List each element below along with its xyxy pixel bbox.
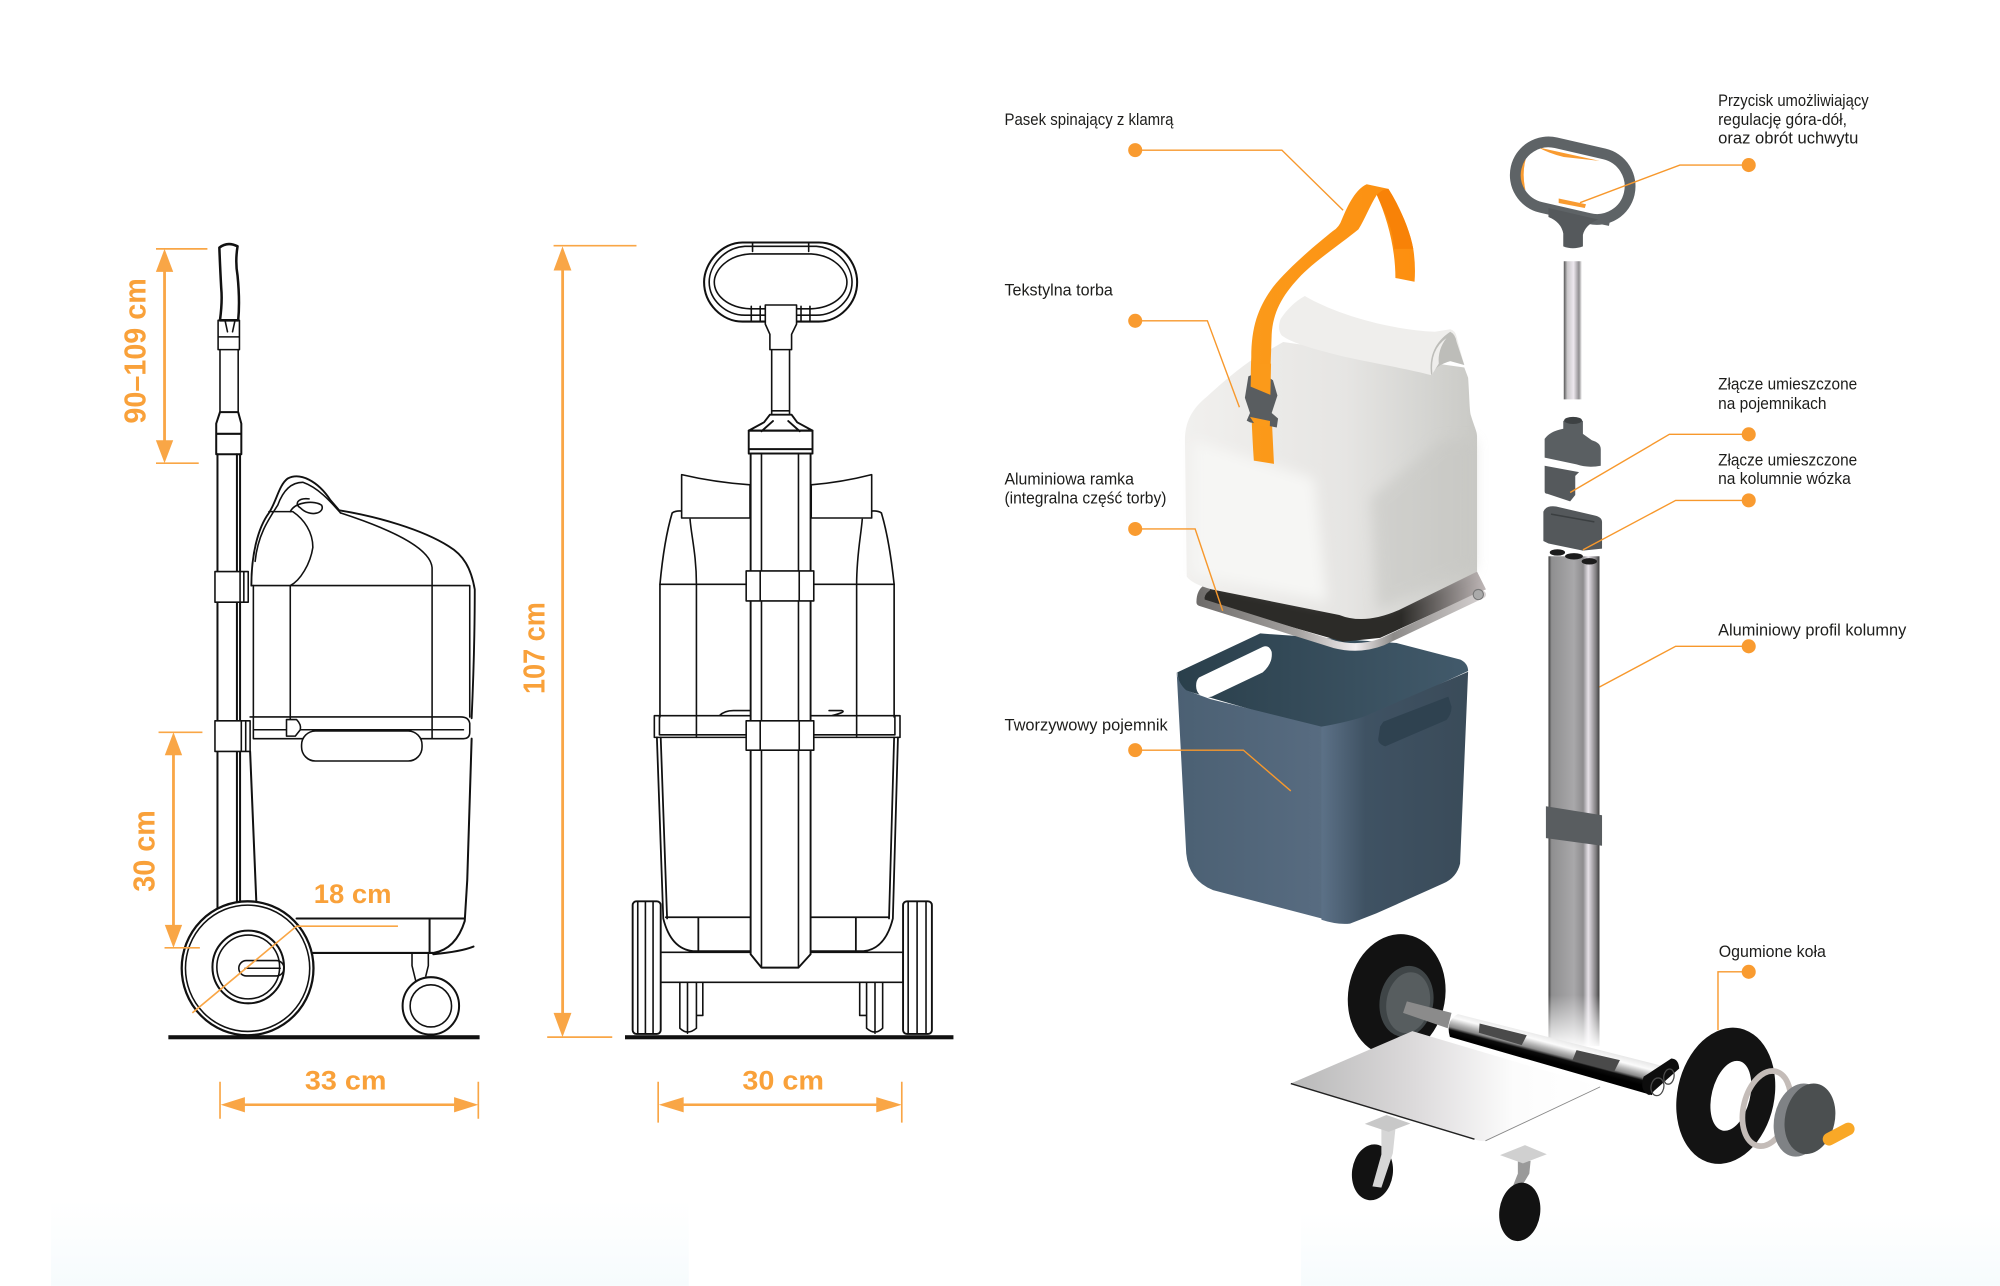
bucket handle slot [302,731,422,761]
clamp upper [746,571,814,601]
callout: bag: Tekstylna torba [1004,281,1114,300]
dimension: 107 cm [518,246,636,1037]
handle [1509,135,1637,248]
callout: container [1004,715,1291,791]
bucket [657,737,898,951]
left caster [1348,1115,1410,1203]
handle collar [218,320,239,350]
hub [212,931,284,1003]
callout: handle button: regulację góra-dół, [1718,110,1847,129]
connector top [1545,417,1601,467]
column holes [1550,549,1597,565]
callout: column profile [1599,620,1907,687]
lower clamp [215,721,250,751]
handle front [704,242,857,322]
left caster [680,982,703,1033]
strap above buckle [1251,364,1271,395]
orange strap [1245,184,1415,464]
column [751,454,811,968]
telescopic collar [216,412,241,454]
frame [654,711,900,737]
tyre [1664,1018,1787,1173]
axle bar [661,952,903,982]
callout: column connector [1583,451,1857,550]
dimension: 33 cm width [220,1065,478,1119]
container right face [1321,672,1468,924]
exploded wheel [1664,1018,1848,1173]
bag seams [660,519,894,737]
dimension: 90-109 cm: 90–109 cm [118,278,152,424]
bucket outline [250,739,474,954]
bag inner arc [269,512,313,586]
strap below buckle [1250,417,1270,427]
aluminium frame [1200,572,1486,647]
plastic container [1177,633,1468,924]
connector plate [1545,466,1579,501]
axle slot [239,961,284,976]
handle stem [765,305,797,350]
callout: column connector: na kolumnie wózka [1718,469,1851,488]
strap inner shadow [1377,189,1413,249]
bag sides [660,511,894,717]
bag side shading [1371,440,1474,610]
handle lower bar [1541,208,1610,222]
left wheel [633,901,661,1034]
right caster [1495,1145,1547,1244]
bag body [1185,342,1477,619]
callout: strap: Pasek spinający z klamrą [1004,110,1174,129]
bag lines [251,513,470,739]
frame hinge [287,720,301,736]
connector column [1543,506,1602,551]
callout: container: Tworzywowy pojemnik [1004,715,1168,734]
callout: frame: Aluminiowa ramka [1004,470,1135,489]
callout: handle button: oraz obrót uchwytu [1718,128,1858,147]
dimension: 30 cm width [658,1065,902,1123]
handle button [1559,198,1586,208]
axle slot left [1479,1023,1527,1045]
callout: container connector: Złącze umieszczone [1718,375,1857,394]
dimension: 107 cm: 107 cm [518,602,552,694]
collar [749,431,812,454]
column clamp [1546,806,1602,846]
roll left [682,475,750,518]
callout: container connector: na pojemnikach [1718,394,1827,413]
callout: rubber wheels: Ogumione koła [1719,942,1827,961]
dimension: 30 cm height [127,732,202,948]
handle orange insert [1514,147,1599,190]
callout: frame: (integralna część torby) [1004,489,1166,508]
callout: handle button [1580,91,1869,203]
bag roll fold [1431,332,1464,375]
upper clamp [215,572,248,602]
axle slot right [1572,1050,1620,1072]
short axle [1403,1001,1452,1028]
lower pole [217,454,240,908]
container left face [1177,672,1327,920]
frame pin [1473,589,1483,600]
callout: container connector [1570,375,1857,492]
handle grip side [219,244,239,320]
frame rim [1200,588,1482,647]
front view line drawing of trolley [625,242,953,1039]
dimension: 18 cm wheel: 18 cm [314,879,392,909]
main wheel [182,901,313,1035]
handle stem [1548,208,1598,248]
handle loop [1509,135,1637,226]
left big wheel [1338,926,1455,1064]
bag roll top [255,482,340,561]
right caster [860,982,883,1033]
clamp lower [746,721,814,750]
bag roll [1279,296,1464,375]
upper tube [220,350,238,412]
container interior [1177,633,1468,730]
plate and rear axle [1291,926,1679,1141]
callout: column connector: Złącze umieszczone [1718,451,1857,470]
bag front shading [1193,440,1327,602]
callout: frame [1004,470,1223,611]
base plate [1291,1031,1600,1141]
hub face [1778,1079,1842,1159]
panel: front view with dimensions [518,242,953,1123]
right wheel [903,901,932,1034]
frame interior [1204,572,1486,642]
axle end cap [1642,1059,1679,1095]
tyre hole [1704,1057,1758,1135]
callout: bag [1004,281,1239,407]
metal ring [1735,1066,1798,1151]
hub side [1767,1079,1832,1162]
container left hole [1196,646,1272,697]
callout: strap [1004,110,1343,210]
textile bag [1185,296,1477,619]
callout: handle button: Przycisk umożliwiający [1718,91,1869,110]
ground line side [168,1035,480,1039]
buckle [1245,375,1278,427]
dimension: 33 cm width: 33 cm [305,1065,386,1095]
upper tube [772,350,790,415]
axle tube [1449,1014,1665,1095]
ground line [625,1035,953,1039]
container right slot [1378,697,1452,746]
callout: rubber wheels [1718,942,1827,1030]
orange pin [1829,1129,1848,1139]
panel: exploded view [1004,91,1907,1244]
dimension: 30 cm width: 30 cm [742,1065,824,1095]
callout: column profile: Aluminiowy profil kolumny [1718,620,1907,639]
dimension: 90-109 cm [118,249,207,463]
dimension: 30 cm height: 30 cm [127,810,161,892]
dimension: 18 cm wheel [192,879,398,1013]
upper tube [1564,261,1582,399]
frame [250,586,470,739]
panel: side view with dimensions [118,244,480,1119]
aluminium column [1547,549,1601,1049]
small caster [403,953,459,1035]
tyre [182,901,313,1035]
top cap [749,415,812,431]
roll right [811,475,872,518]
bag outline [251,476,475,718]
side view line drawing of trolley [182,244,475,1035]
